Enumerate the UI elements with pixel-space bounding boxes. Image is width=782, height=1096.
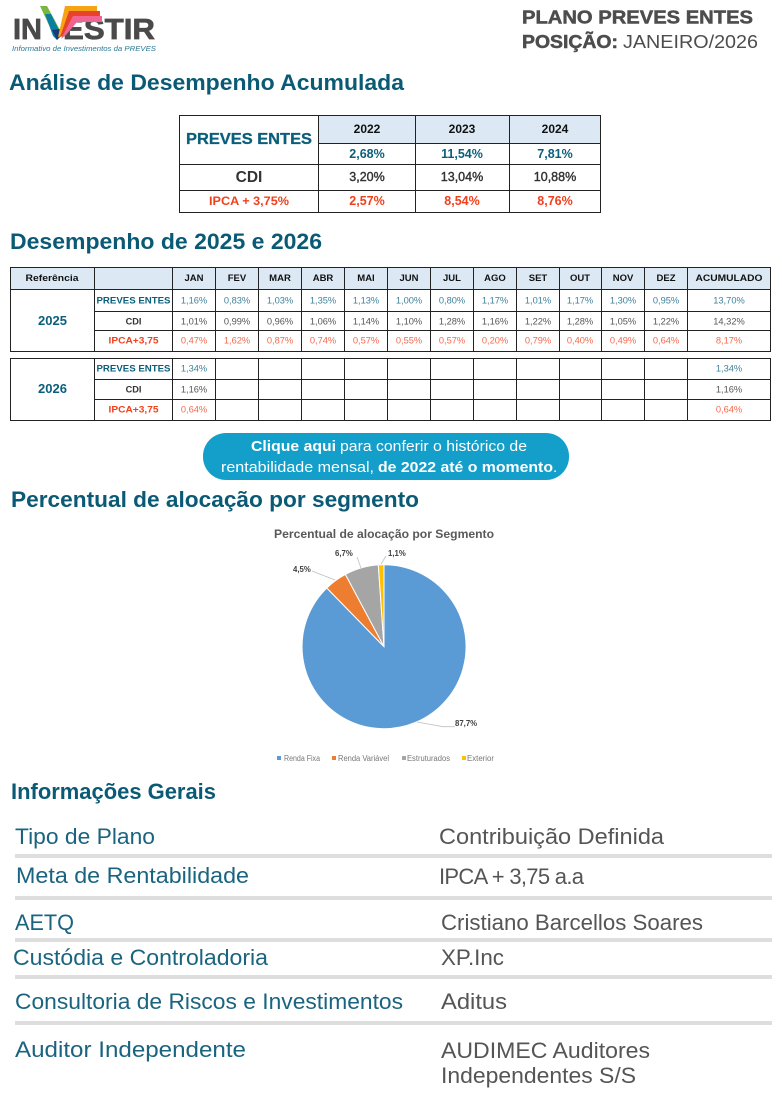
row: PREVES ENTES 2025: 0,83% [224, 296, 250, 306]
table: accumulated performance: 8,54% [444, 194, 480, 208]
callout: link to monthly history: para conferir o histórico de [340, 438, 527, 455]
header row: JAN [184, 273, 204, 284]
table: accumulated performance [180, 116, 601, 212]
row: IPCA+3,75 2025: 0,57% [439, 336, 465, 346]
data labels: 4,5% [293, 565, 311, 574]
row: CDI 2025: CDI [126, 316, 141, 326]
table: monthly performance 2025 [10, 268, 770, 352]
row: IPCA+3,75 2026: IPCA+3,75 [108, 404, 158, 414]
header row: ACUMULADO [696, 273, 762, 284]
row: AETQ: Cristiano Barcellos Soares [441, 910, 703, 935]
row: Auditor Independente [15, 1037, 650, 1088]
row: CDI 2025: 0,99% [224, 316, 250, 326]
pie slices [302, 565, 466, 729]
table: accumulated performance: PREVES ENTES [186, 131, 312, 148]
header row: NOV [613, 273, 634, 284]
row: IPCA+3,75 2025: 0,79% [525, 336, 551, 346]
row: IPCA+3,75 2025: 0,49% [610, 336, 636, 346]
header row: ABR [313, 273, 333, 284]
data labels: 6,7% [335, 549, 353, 558]
heading: Análise de Desempenho Acumulada: Análise de Desempenho Acumulada [9, 70, 405, 95]
heading: Percentual de alocação por segmento: Percentual de alocação por segmento [11, 487, 419, 512]
row: CDI 2025: 14,32% [713, 316, 745, 326]
row: Tipo de Plano: Contribuição Definida [439, 824, 665, 849]
callout: link to monthly history: . [553, 459, 557, 476]
chart: allocation by segment pie [274, 527, 494, 763]
row: CDI 2025: 1,16% [482, 316, 508, 326]
callout: link to monthly history [203, 433, 569, 480]
header row: MAI [357, 273, 375, 284]
row: PREVES ENTES 2026: 1,34% [181, 364, 207, 374]
chart title: Percentual de alocação por Segmento [274, 527, 494, 541]
row: AETQ [15, 910, 703, 935]
row: CDI 2025: 1,05% [610, 316, 636, 326]
row: PREVES ENTES 2025: PREVES ENTES [96, 296, 170, 306]
row: CDI 2025: 0,96% [267, 316, 293, 326]
row: IPCA+3,75 2025: 0,47% [181, 336, 207, 346]
row: IPCA+3,75 2025: 0,64% [653, 336, 679, 346]
header row: DEZ [656, 273, 676, 284]
row: CDI 2026: CDI [126, 384, 141, 394]
row: CDI 2025: 1,22% [653, 316, 679, 326]
row: PREVES ENTES 2025: 1,00% [396, 296, 422, 306]
row: AETQ: AETQ [15, 910, 74, 935]
row: Custódia e Controladoria [13, 945, 504, 970]
header: plan and position: JANEIRO/2026 [623, 31, 758, 52]
row: Tipo de Plano: Tipo de Plano [15, 824, 155, 849]
row: Auditor Independente: Independentes S/S [441, 1063, 636, 1088]
heading: Desempenho de 2025 e 2026: Desempenho de 2025 e 2026 [10, 229, 322, 254]
row: IPCA+3,75 2025: 0,20% [482, 336, 508, 346]
panel: general information [13, 824, 772, 1088]
row: PREVES ENTES 2026: PREVES ENTES [96, 364, 170, 374]
table: accumulated performance: 7,81% [537, 147, 573, 161]
row: Meta de Rentabilidade [16, 863, 585, 889]
data labels: 1,1% [388, 549, 406, 558]
row: Auditor Independente: Auditor Independente [15, 1037, 246, 1062]
row: CDI 2025: 1,01% [181, 316, 207, 326]
table: monthly performance 2026 [10, 358, 770, 420]
header: plan and position: POSIÇÃO: [522, 31, 618, 52]
header row: JUL [443, 273, 461, 284]
logo: Investir: ESTIR [63, 14, 155, 46]
legend: Estruturados [407, 754, 450, 763]
row: PREVES ENTES 2025: 1,30% [610, 296, 636, 306]
table: accumulated performance: 11,54% [441, 147, 483, 161]
row: IPCA+3,75 2025 [108, 336, 742, 346]
row: IPCA+3,75 2025: 0,57% [353, 336, 379, 346]
row: Custódia e Controladoria: Custódia e Controladoria [13, 945, 269, 970]
row: CDI 2025: 1,28% [567, 316, 593, 326]
legend [277, 754, 494, 763]
header row: SET [529, 273, 547, 284]
row: CDI 2026 [126, 384, 742, 394]
row: PREVES ENTES 2026: 1,34% [716, 364, 742, 374]
row: IPCA+3,75 2025: 0,74% [310, 336, 336, 346]
row: CDI 2025: 1,14% [353, 316, 379, 326]
header row [26, 273, 762, 284]
row: PREVES ENTES 2025: 13,70% [713, 296, 745, 306]
row: Meta de Rentabilidade: Meta de Rentabilidade [16, 863, 249, 888]
icon: coloured V [40, 6, 102, 40]
table: accumulated performance: 2,57% [349, 194, 385, 208]
row: CDI 2025: 1,28% [439, 316, 465, 326]
row: PREVES ENTES 2025: 0,95% [653, 296, 679, 306]
row: IPCA+3,75 2026 [108, 404, 742, 414]
table: accumulated performance: IPCA + 3,75% [209, 194, 289, 208]
logo: Investir: Informativo de Investimentos da PREVES [12, 44, 156, 53]
row: PREVES ENTES 2026 [96, 364, 742, 374]
header row: AGO [484, 273, 506, 284]
row: PREVES ENTES 2025: 1,01% [525, 296, 551, 306]
row: IPCA+3,75 2025: 0,87% [267, 336, 293, 346]
heading: Informações Gerais: Informações Gerais [11, 779, 216, 804]
table: accumulated performance: CDI [236, 169, 262, 186]
year label 2026: 2026 [38, 381, 67, 396]
row: IPCA+3,75 2025: 0,40% [567, 336, 593, 346]
row: CDI 2026: 1,16% [716, 384, 742, 394]
header: plan and position [522, 6, 758, 52]
row: PREVES ENTES 2025: 1,17% [482, 296, 508, 306]
table: accumulated performance: 2023 [449, 122, 476, 136]
row: Tipo de Plano [15, 824, 665, 849]
row: PREVES ENTES 2025: 0,80% [439, 296, 465, 306]
row: IPCA+3,75 2025: 0,55% [396, 336, 422, 346]
header row: Referência [26, 273, 79, 284]
legend: Renda Variável [338, 754, 389, 763]
row: CDI 2025 [126, 316, 745, 326]
data labels [293, 549, 477, 728]
row: CDI 2025: 1,10% [396, 316, 422, 326]
row: PREVES ENTES 2025 [96, 296, 745, 306]
row: CDI 2025: 1,22% [525, 316, 551, 326]
legend: Exterior [467, 754, 494, 763]
table: accumulated performance: 2024 [542, 122, 569, 136]
table: accumulated performance: 8,76% [537, 194, 573, 208]
row: Consultoria de Riscos e Investimentos: Consultoria de Riscos e Investimentos [15, 989, 403, 1014]
row: PREVES ENTES 2025: 1,13% [353, 296, 379, 306]
row: IPCA+3,75 2025: 8,17% [716, 336, 742, 346]
callout: link to monthly history: rentabilidade mensal, [221, 459, 374, 476]
table: accumulated performance: 13,04% [441, 170, 483, 184]
row: PREVES ENTES 2025: 1,17% [567, 296, 593, 306]
header row: FEV [228, 273, 247, 284]
table: accumulated performance: 10,88% [534, 170, 576, 184]
callout: link to monthly history: Clique aqui [251, 438, 336, 455]
header row: JUN [399, 273, 419, 284]
row: CDI 2026: 1,16% [181, 384, 207, 394]
data labels: 87,7% [455, 719, 477, 728]
row: CDI 2025: 1,06% [310, 316, 336, 326]
row: Consultoria de Riscos e Investimentos: Aditus [441, 989, 507, 1014]
row: PREVES ENTES 2025: 1,35% [310, 296, 336, 306]
row: Custódia e Controladoria: XP.Inc [441, 945, 504, 970]
row: IPCA+3,75 2025: 1,62% [224, 336, 250, 346]
legend: Renda Fixa [284, 754, 320, 763]
row: PREVES ENTES 2025: 1,16% [181, 296, 207, 306]
leader lines [312, 556, 455, 727]
row: Meta de Rentabilidade: IPCA + 3,75 a.a [439, 864, 585, 889]
callout: link to monthly history: de 2022 até o momento [378, 459, 553, 476]
logo: Investir: IN [13, 14, 42, 46]
table: accumulated performance: 3,20% [349, 170, 385, 184]
logo: Investir [12, 6, 156, 53]
header row: OUT [570, 273, 590, 284]
row: IPCA+3,75 2026: 0,64% [181, 404, 207, 414]
row: IPCA+3,75 2026: 0,64% [716, 404, 742, 414]
row: Auditor Independente: AUDIMEC Auditores [441, 1038, 650, 1063]
year label 2025: 2025 [38, 313, 67, 328]
header: plan and position: PLANO PREVES ENTES [522, 6, 753, 28]
row: IPCA+3,75 2025: IPCA+3,75 [108, 336, 158, 346]
header row: MAR [269, 273, 291, 284]
table: accumulated performance: 2,68% [349, 147, 385, 161]
table: accumulated performance: 2022 [354, 122, 381, 136]
row: PREVES ENTES 2025: 1,03% [267, 296, 293, 306]
